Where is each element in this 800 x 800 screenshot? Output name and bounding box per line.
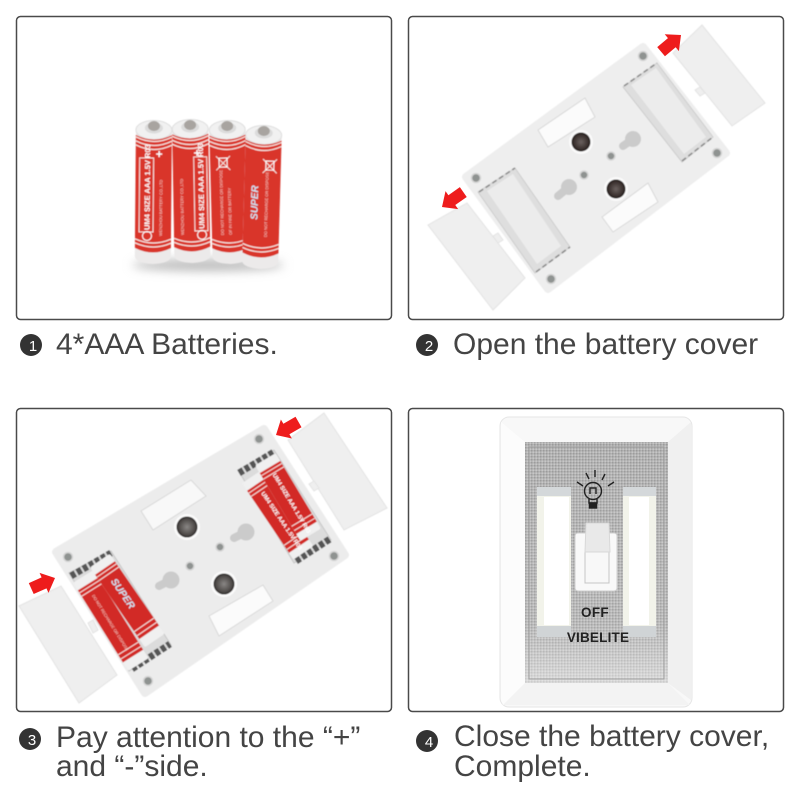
panel 2: open cover xyxy=(408,16,784,320)
battery group: WENZHOU BATTERY CO.,LTD xyxy=(158,180,163,236)
magnets xyxy=(174,514,200,540)
battery group xyxy=(135,119,282,269)
battery group: + xyxy=(193,146,201,160)
caption 4: Complete. xyxy=(454,750,591,783)
panel 3: batteries installed: UM4 SIZE AAA 1.5V R03 xyxy=(271,473,311,535)
caption 1: 1 xyxy=(29,338,37,355)
panel 3: batteries installed: SUPER xyxy=(108,577,137,612)
compartment right xyxy=(623,63,713,162)
batteries right xyxy=(242,470,313,560)
arrow down left xyxy=(436,183,470,216)
cover right xyxy=(288,413,387,530)
panel 1: batteries xyxy=(16,16,392,320)
cover right xyxy=(673,25,765,126)
battery shadow xyxy=(132,259,284,271)
panel 4: assembled light xyxy=(408,408,784,712)
caption 3: Pay attention to the “+” xyxy=(56,721,360,754)
caption 3 xyxy=(19,721,360,783)
caption 4 xyxy=(416,720,769,783)
batteries right: UM4 SIZE AAA 1.5V R03 xyxy=(259,491,303,552)
label VIBELITE: VIBELITE xyxy=(567,630,629,645)
left LED xyxy=(537,487,571,637)
screws xyxy=(472,52,722,284)
bulb icon xyxy=(577,470,614,508)
adhesive strips xyxy=(141,480,206,530)
magnets xyxy=(569,130,593,154)
white frame xyxy=(500,417,692,707)
screws xyxy=(64,434,338,686)
caption 2: Open the battery cover xyxy=(453,328,758,361)
keyholes xyxy=(159,524,254,588)
battery group: OF IN FIRE OR BATTERY xyxy=(227,187,233,235)
batteries left: DO NOT RECHARGE OR DISPOSE xyxy=(91,594,130,652)
silver diffuser xyxy=(525,442,668,683)
arrow up right xyxy=(654,27,688,60)
keyholes xyxy=(558,131,641,196)
caption 2: 2 xyxy=(425,338,433,355)
cover left xyxy=(428,203,525,310)
light base plate xyxy=(428,25,765,310)
arrow top xyxy=(270,412,304,445)
arrow left xyxy=(27,568,59,599)
battery group: + xyxy=(156,147,163,161)
battery group: SUPER xyxy=(249,184,261,220)
panel 3: batteries installed xyxy=(16,408,392,712)
caption 1: 4*AAA Batteries. xyxy=(56,328,278,361)
battery group: DO NOT RECHARGE OR DISPOSE xyxy=(263,171,270,237)
batteries left xyxy=(73,570,149,671)
caption 3: and “-”side. xyxy=(56,750,208,783)
compartment left xyxy=(69,551,171,671)
adhesive strips xyxy=(538,98,595,147)
battery group: WENZHOU BATTERY CO.,LTD xyxy=(179,179,185,235)
caption 4: Close the battery cover, xyxy=(454,720,769,753)
caption 4: 4 xyxy=(425,734,433,751)
battery group: UM4 SIZE AAA 1.5V R03 xyxy=(196,143,206,229)
cover left xyxy=(19,586,117,703)
toggle switch xyxy=(575,523,617,591)
caption 3: 3 xyxy=(28,732,36,749)
battery group: UM4 SIZE AAA 1.5V R03 xyxy=(143,144,152,230)
right LED xyxy=(623,487,656,637)
compartment left xyxy=(478,168,570,273)
compartment right xyxy=(238,450,331,563)
label OFF: OFF xyxy=(581,605,609,620)
battery group: DO NOT RECHARGE OR DISPOSE xyxy=(218,170,225,235)
